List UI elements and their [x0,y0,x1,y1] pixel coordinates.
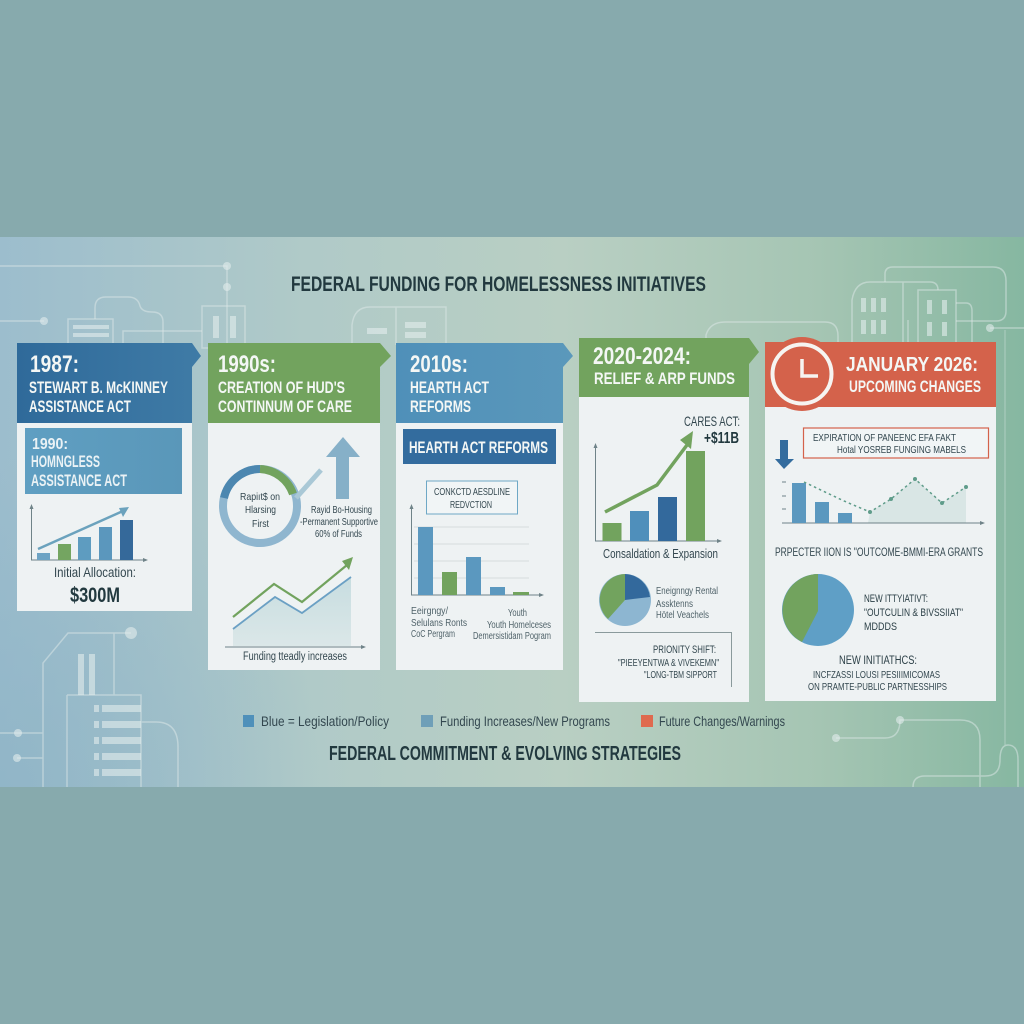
pie caption: MDDDS [864,621,897,633]
pie legend: Eneignngy Rental [656,586,718,597]
pie chart: relief [599,574,651,626]
legend: Blue = Legislation/Policy [261,713,389,729]
panel: January 2026 [765,337,996,701]
callout: expiration [804,428,988,458]
new initiatives text: ON PRAMTE-PUBLIC PARTNESSHIPS [808,681,947,693]
bar chart labels: right: Youth [508,608,527,619]
stat: CARES Act: +$11B [704,430,739,447]
title: FEDERAL FUNDING FOR HOMELESSNESS INITIATIVES [291,273,706,296]
callout: reduction: REDVCTION [450,499,492,511]
bar chart labels: left: Eeirgngy/ [411,606,448,617]
bar chart caption: Consaldation & Expansion [603,546,718,561]
header: January 2026 [765,342,996,407]
allocation text: $300M [70,584,120,607]
header: January 2026: JANUARY 2026: [846,354,978,376]
bar chart labels: right: Youth Homelceses [487,620,551,631]
donut caption [300,505,378,540]
donut caption: 60% of Funds [315,529,362,540]
panel: 2020-2024 [579,338,759,702]
bar chart labels: right [473,608,551,642]
legend: Future Changes/Warnings [659,713,785,729]
donut chart: housing first: Rapiıt$ on [240,491,280,503]
sub-heading box: 1990: HOMNGLESS [31,452,100,471]
sub-heading box: 1990 [25,428,182,494]
background circuit and building line art [0,266,1024,787]
new initiatives text [808,655,947,693]
header: 2020-2024: 2020-2024: [593,343,691,370]
header: 2010s [396,343,573,423]
donut caption: -Permanent Supportive [300,517,378,528]
sub-heading box: Hearth Act [403,429,556,464]
new initiatives text: INCFZASSI LOUSI PESIIIMICOMAS [813,669,940,681]
pie caption: NEW ITTYIATIVT: [864,593,928,605]
header: 1987: STEWART B. McKINNEY [29,378,168,397]
header: 2010s: HEARTH ACT [410,378,489,397]
pie legend [656,586,718,621]
callout: reduction: CONKCTD AESDLINE [434,486,510,498]
stat: CARES Act [684,413,740,447]
icon: clock [765,337,839,411]
arrow: up [326,437,360,499]
line chart: funding [225,557,366,649]
background art fills [13,262,994,776]
sub-heading box: 1990: ASSISTANCE ACT [31,471,127,490]
sub-heading box: Hearth Act: HEARTH ACT REFORMS [409,438,548,457]
bar chart: programs [410,504,544,597]
combo chart: projected funding [782,477,985,525]
donut chart: housing first: Hlarsing [245,504,276,516]
bar chart labels: left [411,606,467,640]
donut chart: housing first [223,469,297,543]
bar chart labels: right: Demersistidam Pogram [473,631,551,642]
pie chart: initiatives [782,574,854,646]
header: 2020-2024 [579,338,759,397]
pie caption: "OUTCULIN & BIVSSIIAT" [864,607,963,619]
header: 1990s: 1990s: [218,351,276,378]
allocation text [54,564,136,607]
callout: expiration: EXPIRATION OF PANEENC EFA FAKT [813,432,956,444]
pie legend: Hötel Veachels [656,610,709,621]
callout: priority shift [595,632,732,687]
panel: 1990s [208,343,391,670]
header: 1990s [208,343,391,423]
allocation text: Initial Allocation: [54,564,136,580]
header: 1987: 1987: [30,351,79,378]
pie caption [864,593,963,633]
footer heading: FEDERAL COMMITMENT & EVOLVING STRATEGIES [329,743,681,765]
pie legend: Assktenns [656,599,693,610]
header: 2010s: 2010s: [410,351,468,378]
header: 2010s: REFORMS [410,397,471,416]
arrow: down [775,440,794,469]
stat: CARES Act: CARES ACT: [684,413,740,429]
panel: 1987 [17,343,201,611]
callout: expiration: Hotal YOSREB FUNGING MABELS [837,444,966,456]
header: 1990s: CREATION OF HUD'S [218,378,345,397]
donut chart: housing first: First [252,518,269,530]
panel: 2010s [396,343,573,670]
central background band [0,237,1024,787]
callout: priority shift: "LONG-TBM SIPPORT [644,669,717,681]
bar chart: relief funds [594,431,722,543]
donut caption: Rayid Bo-Housing [311,505,372,516]
callout: priority shift: "PIEEYENTWA & VIVEKEMN" [618,657,719,669]
new initiatives text: NEW INITIATHCS: [839,655,917,667]
line chart caption: Funding tteadly increases [243,651,347,663]
header: 1987 [17,343,201,423]
header: 2020-2024: RELIEF & ARP FUNDS [594,369,735,388]
legend [243,713,785,729]
callout: priority shift: PRIONITY SHIFT: [653,644,716,656]
callout: reduction [426,481,518,514]
bar chart labels: left: CoC Pergram [411,629,455,640]
header: 1990s: CONTINNUM OF CARE [218,397,352,416]
legend: Funding Increases/New Programs [440,713,610,729]
pointer line [296,470,321,498]
sub-heading box: 1990: 1990: [32,436,68,453]
bar chart: initial growth [30,504,148,562]
bar chart labels: left: Selulans Ronts [411,618,467,629]
header: 1987: ASSISTANCE ACT [29,397,131,416]
